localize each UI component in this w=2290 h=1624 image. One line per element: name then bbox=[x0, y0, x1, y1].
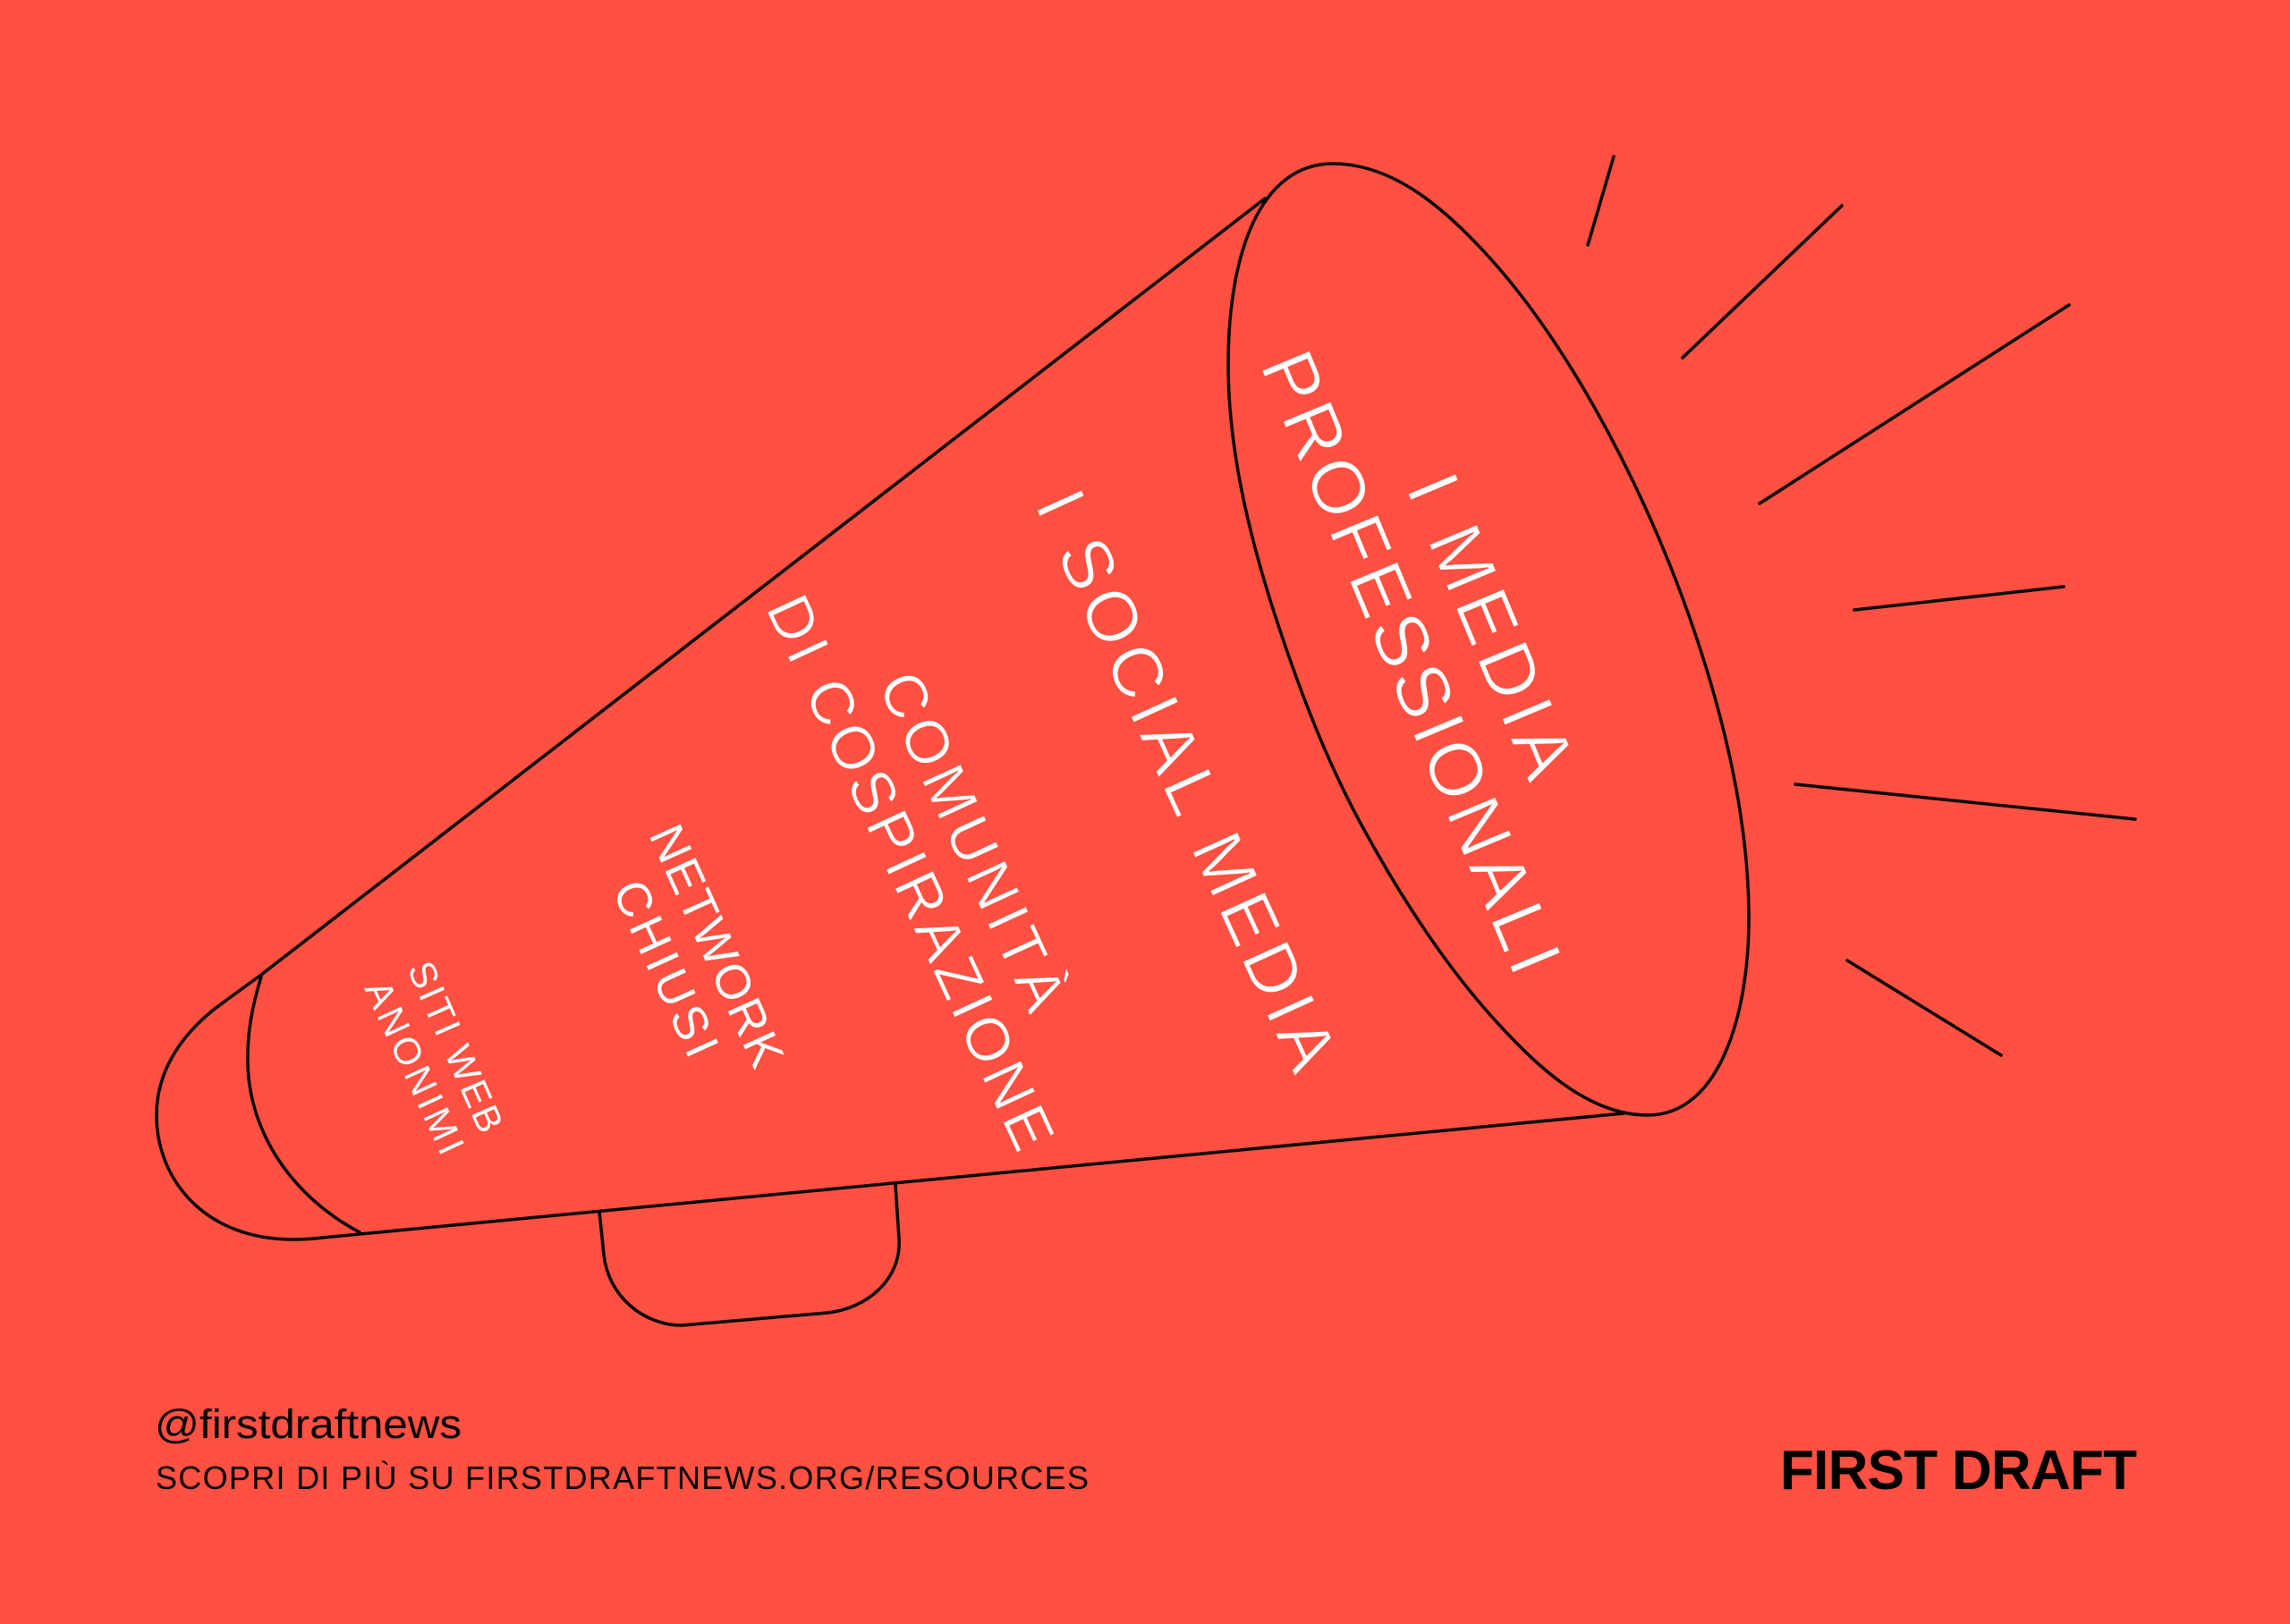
label: Comunità di cospirazione: DI COSPIRAZIONE bbox=[753, 585, 1068, 1161]
label: Comunità di cospirazione: COMUNITÀ bbox=[865, 662, 1080, 1022]
label: Network chiusi: CHIUSI bbox=[602, 872, 729, 1065]
label: Siti web anonimi: ANONIMI bbox=[357, 974, 472, 1161]
label: Siti web anonimi: SITI WEB bbox=[400, 955, 512, 1138]
label: I media professionali: PROFESSIONALI bbox=[1244, 339, 1578, 985]
First Draft logo: FIRST DRAFT bbox=[1780, 1440, 2137, 1501]
megaphone bell opening bbox=[1228, 164, 1749, 1115]
social handle: @firstdraftnews bbox=[155, 1401, 462, 1447]
label: Network chiusi: NETWORK bbox=[639, 816, 794, 1075]
label: Siti web anonimi bbox=[357, 955, 512, 1161]
label: I media professionali: I MEDIA bbox=[1390, 461, 1592, 791]
website call to action: SCOPRI DI PIÙ SU FIRSTDRAFTNEWS.ORG/RESOURCES bbox=[156, 1459, 1089, 1496]
label: I social media: I SOCIAL MEDIA bbox=[1021, 478, 1353, 1083]
megaphone handle bbox=[599, 1185, 899, 1325]
sound rays bbox=[1588, 156, 2135, 1055]
megaphone body bbox=[157, 199, 1624, 1239]
megaphone illustration bbox=[157, 164, 1749, 1325]
megaphone mouthpiece curve bbox=[248, 977, 360, 1232]
